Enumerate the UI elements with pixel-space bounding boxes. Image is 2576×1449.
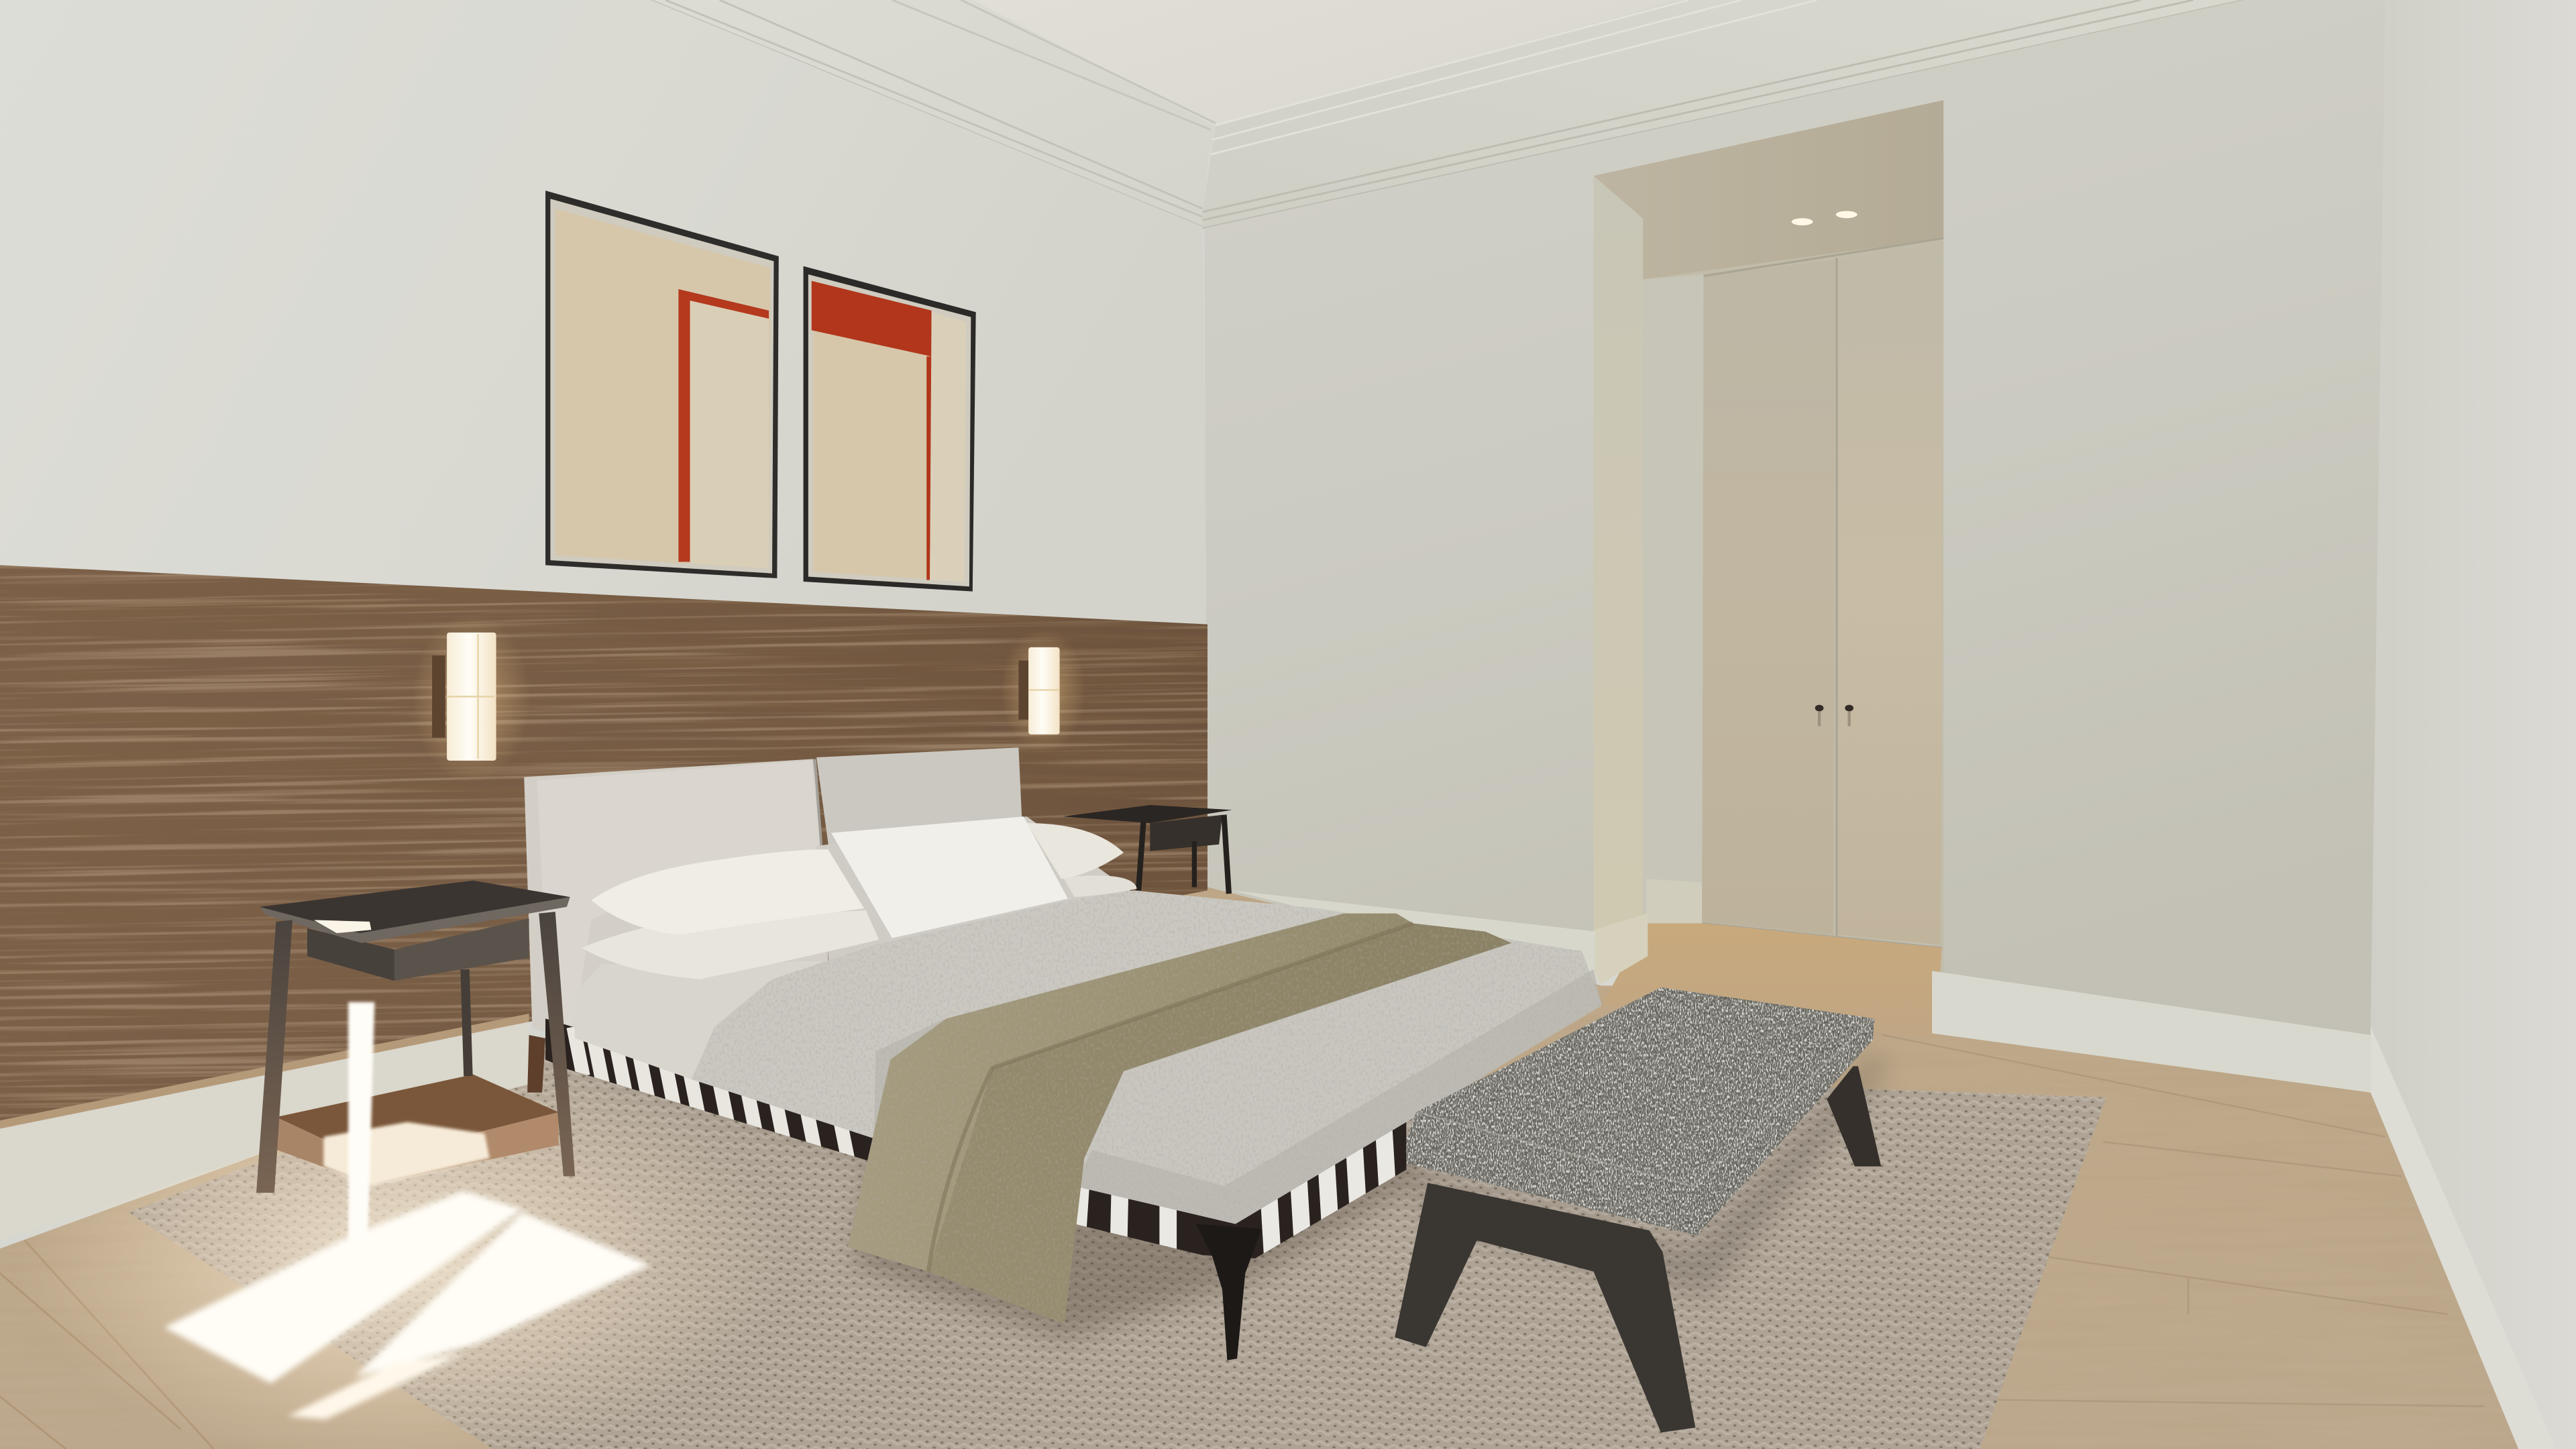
wardrobe door left: [1702, 260, 1835, 934]
straps: [574, 1027, 1388, 1269]
far right baseboard: [2371, 1027, 2557, 1449]
left baseboard: [0, 1022, 529, 1240]
ceiling: [649, 0, 2251, 233]
wall sconce left: [432, 633, 496, 761]
bed headboard: [524, 747, 1137, 1038]
wall sconce right: [1018, 647, 1060, 735]
floor: [0, 887, 2576, 1449]
bed cover: [690, 887, 1610, 1232]
soft shadow under the bed: [559, 1038, 1430, 1339]
upholstered bench: [1395, 979, 1883, 1433]
closet baseboard: [1646, 879, 1702, 928]
door knobs: [1815, 705, 1854, 726]
left wall: [0, 0, 1208, 626]
sunlight patch on the floor: [16, 1043, 789, 1449]
mattress: [574, 961, 871, 1084]
crown moulding left: [651, 0, 1216, 228]
nightstand lower shelf: [273, 1075, 559, 1186]
light beam on the nightstand leg: [348, 1002, 374, 1240]
niche floor: [1602, 923, 1942, 1038]
bed frame with strap base: [527, 1018, 1406, 1360]
niche ceiling: [1594, 100, 1943, 279]
right wall: [1204, 0, 2385, 1093]
niche side wall: [1643, 274, 1704, 923]
front legs: [256, 920, 292, 1193]
bench legs: [1395, 1066, 1881, 1433]
artwork right: [804, 266, 976, 592]
bench cushion: [1406, 987, 1874, 1236]
back wall baseboard: [1232, 890, 1595, 969]
nightstand top: [260, 881, 570, 940]
niche reveal baseboard: [1594, 914, 1648, 984]
bed leg: [1196, 1224, 1262, 1360]
artwork left: [545, 191, 779, 578]
right wall baseboard: [1932, 971, 2371, 1093]
rug: [128, 1043, 2106, 1449]
back leg: [465, 969, 468, 1076]
doorway niche: [1594, 100, 1943, 1038]
right nightstand: [1063, 805, 1232, 894]
wood headboard panel: [0, 565, 1208, 1128]
backing behind pillows: [816, 816, 1137, 969]
pillows: [582, 816, 1137, 979]
far right wall: [2371, 0, 2576, 1449]
wardrobe door right: [1838, 241, 1943, 945]
crown moulding right: [1203, 0, 2244, 228]
olive throw blanket: [838, 904, 1519, 1331]
left nightstand: [256, 881, 575, 1240]
niche reveal: [1594, 176, 1643, 930]
recessed spot lights: [1792, 211, 1858, 225]
nightstand drawer: [307, 918, 529, 981]
soft shadow under the bench: [1413, 1051, 1889, 1298]
